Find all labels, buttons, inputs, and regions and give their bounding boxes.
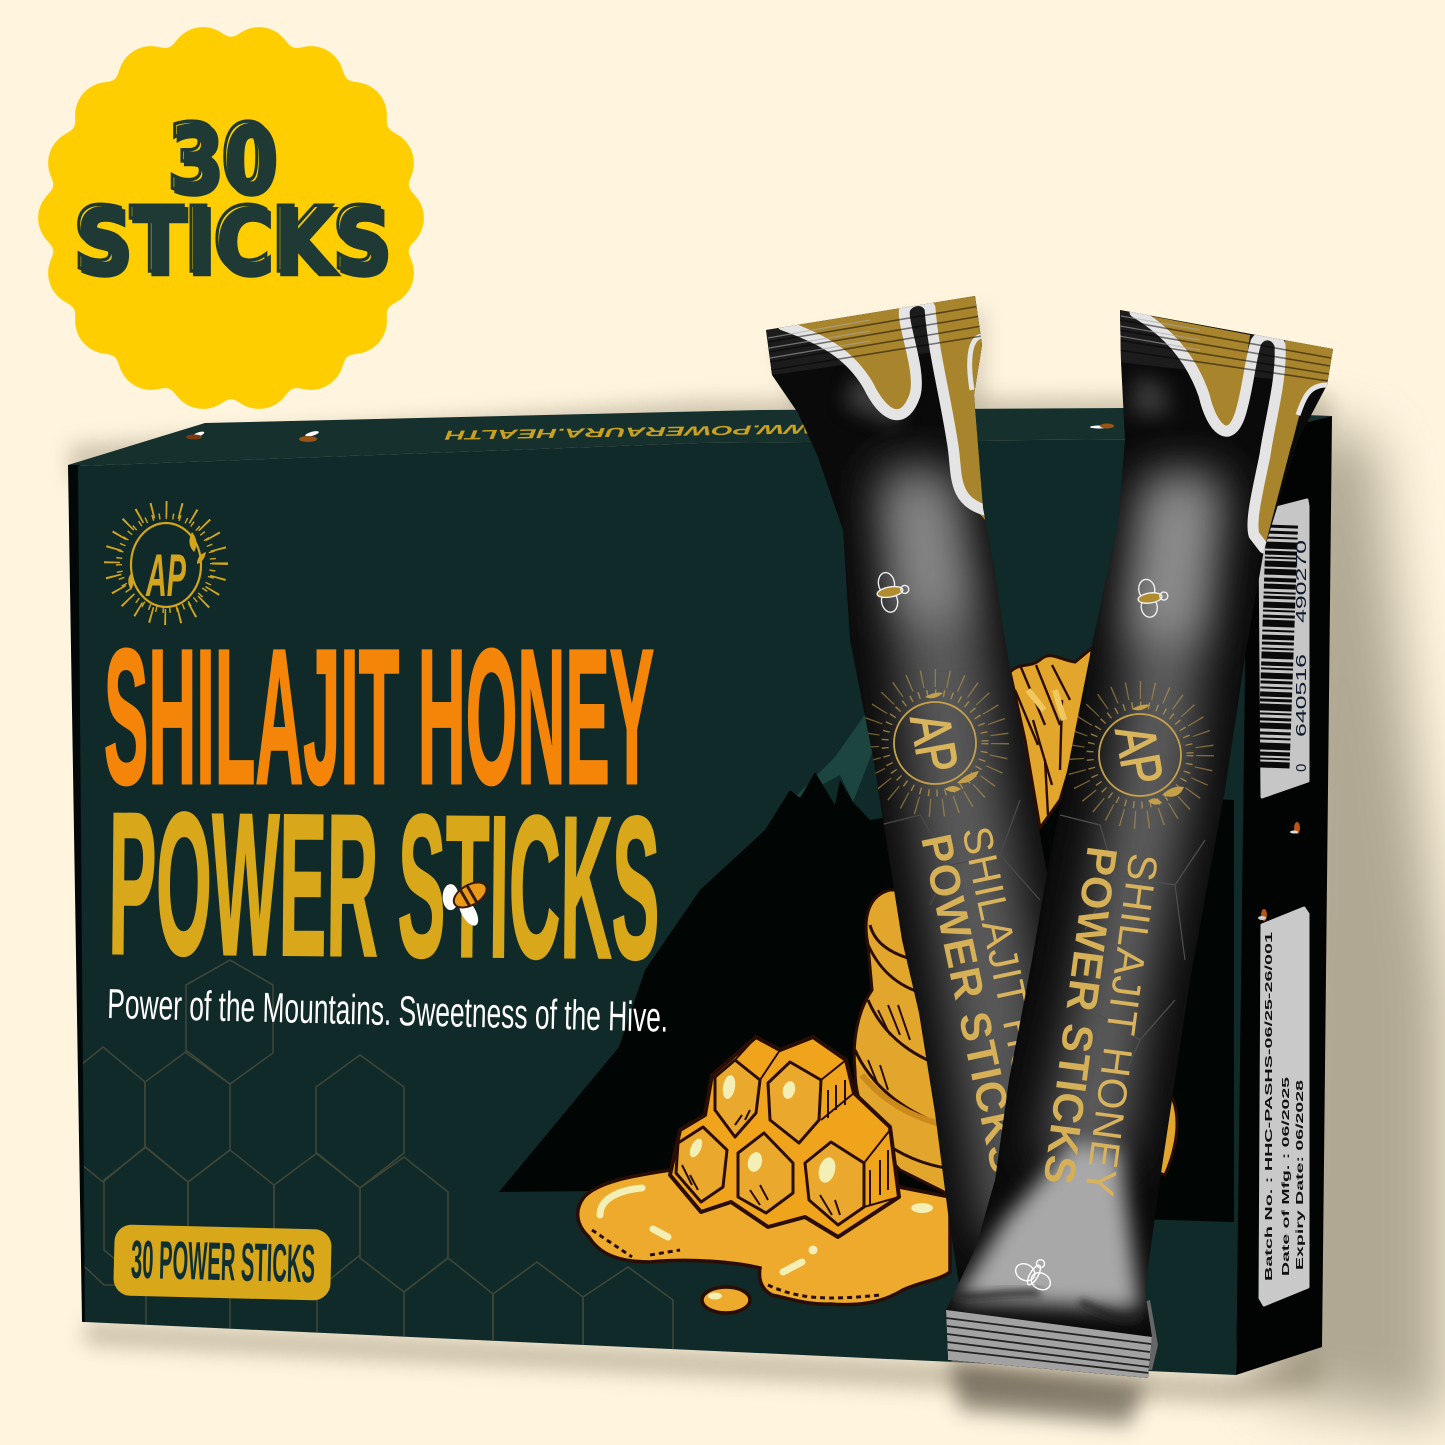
barcode digits xyxy=(1293,540,1310,772)
sachet foot highlight xyxy=(955,1140,1140,1310)
comb highlights xyxy=(687,1074,838,1185)
crimped seal xyxy=(766,296,982,375)
drip outline xyxy=(1135,312,1280,548)
right side: barcode label xyxy=(1260,500,1310,797)
flap url text: WWW.POWERAURA.HEALTH xyxy=(444,421,837,443)
tagline: Power of the Mountains. Sweetness of the Hive. xyxy=(107,980,669,1041)
barcode digits: 0 xyxy=(1293,764,1310,772)
box right side xyxy=(1236,416,1332,1375)
badge number: 30 xyxy=(167,104,275,212)
sachet logo xyxy=(1075,690,1205,820)
hexagon pattern xyxy=(82,959,674,1350)
icon: bee on title xyxy=(431,866,500,936)
sachet logo xyxy=(870,678,1000,808)
faint hex lines xyxy=(1060,814,1206,1071)
seal crimp lines xyxy=(768,306,982,370)
sachet body xyxy=(766,296,1040,1282)
badge shape xyxy=(38,27,424,409)
product box: 30 POWER STICKS xyxy=(130,1230,316,1294)
mountain: black silhouette xyxy=(499,772,1234,1222)
hive right edge xyxy=(1150,1080,1177,1175)
sachet power text: POWER STICKS xyxy=(1034,844,1126,1187)
sachet logo: AP xyxy=(1103,721,1176,789)
hive top dome xyxy=(1010,648,1092,828)
mfg date: Date of Mfg. : 06/2025 xyxy=(1280,1077,1292,1276)
bottom crimp xyxy=(946,1310,1152,1378)
drip outline xyxy=(783,300,985,510)
gold drip xyxy=(1151,316,1250,426)
sachet body xyxy=(940,300,1340,1390)
product box xyxy=(60,408,1332,1380)
batch number: Batch No. : HHC-PASHS-06/25-26/001 xyxy=(1263,932,1275,1281)
seal crimp lines xyxy=(1118,320,1331,381)
sachet shilajit text: SHILAJIT HONEY xyxy=(1076,851,1167,1199)
honey hive xyxy=(854,648,1177,1200)
mountain: teal peak xyxy=(790,700,885,802)
sachet sheen upper xyxy=(1040,480,1220,1160)
stick sachet 1 xyxy=(766,296,1047,1282)
honey puddle xyxy=(578,1160,950,1305)
small bees on box xyxy=(186,424,1300,921)
gold drip xyxy=(797,308,911,410)
logo: box sunburst xyxy=(112,509,220,617)
box left edge xyxy=(68,465,86,1322)
faint hex lines xyxy=(880,800,1040,905)
logo leaves xyxy=(128,532,206,590)
crimped seal xyxy=(1117,310,1333,385)
barcode digits: 490270 xyxy=(1293,540,1310,623)
barcode bars xyxy=(1274,525,1282,768)
honeycomb xyxy=(670,1037,899,1237)
sachet back fold xyxy=(948,1300,1158,1370)
right side: batch label xyxy=(1260,908,1308,1305)
count pill xyxy=(113,1224,332,1301)
box and stick shadows xyxy=(70,310,1445,1425)
hive body left xyxy=(854,890,980,1200)
expiry date: Expiry Date: 06/2028 xyxy=(1294,1080,1306,1270)
box top flap xyxy=(68,408,1332,466)
badge label: STICKS xyxy=(73,188,389,293)
foot bee xyxy=(1015,1259,1051,1290)
badge number: 30 xyxy=(170,108,278,216)
barcode digits: 640516 xyxy=(1293,654,1310,737)
sachet logo: AP xyxy=(898,709,971,777)
sachet shilajit text: SHILAJIT HONEY xyxy=(953,822,1070,1169)
honey droplet xyxy=(702,1287,750,1313)
stick sachet 2 xyxy=(940,300,1340,1390)
box front face xyxy=(78,438,1248,1375)
badge label: STICKS xyxy=(76,192,392,296)
comb cells xyxy=(676,1060,864,1225)
sachet sheen xyxy=(885,470,1040,1240)
sachet bee xyxy=(876,572,910,613)
sachet power text: POWER STICKS xyxy=(911,830,1030,1178)
sachet bee xyxy=(1137,578,1168,618)
badge: 30 sticks xyxy=(38,27,424,409)
logo: box sunburst: AP xyxy=(145,542,186,609)
